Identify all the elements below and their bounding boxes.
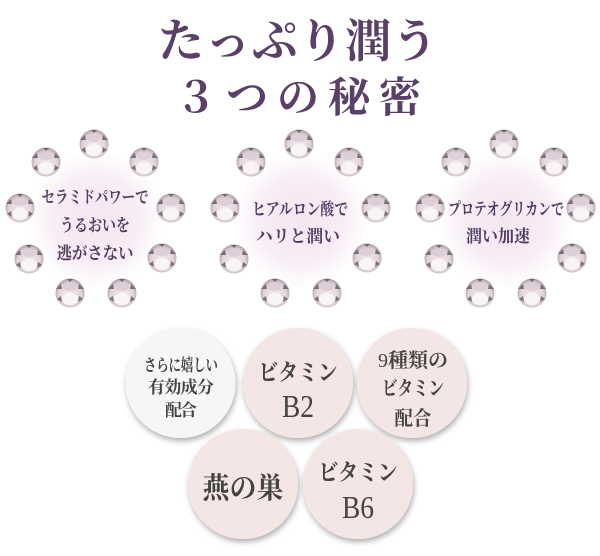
badge: additional ingredients: [126, 328, 236, 438]
text: hyaluronic acid: ハリと潤い: [256, 227, 340, 246]
badge: nine vitamins: ビタミン: [382, 377, 444, 400]
text: proteoglycan: [448, 200, 564, 246]
badge: nine vitamins: 9種類の: [378, 349, 448, 372]
badge: vitamin B2: [243, 328, 353, 438]
title: たっぷり潤う: [158, 16, 438, 67]
badge: additional ingredients: 有効成分: [148, 377, 214, 397]
text: ceramide power: うるおいを: [60, 216, 130, 235]
badge: vitamin B6: [303, 429, 413, 539]
text: ceramide power: セラミドパワーで: [42, 188, 148, 207]
panel: ceramide power: [6, 130, 186, 308]
panel: proteoglycan: [416, 130, 596, 308]
text: hyaluronic acid: [252, 200, 348, 246]
icon: ring of gems: [6, 130, 186, 308]
text: proteoglycan: プロテオグリカンで: [448, 200, 564, 219]
title: [158, 16, 438, 122]
text: proteoglycan: 潤い加速: [466, 226, 531, 246]
badge: bird's nest: [188, 429, 298, 539]
panel: hyaluronic acid: [210, 130, 390, 308]
title: ３つの秘密: [175, 76, 423, 122]
badge: nine vitamins: [357, 328, 467, 438]
badge: vitamin B6: ビタミン: [318, 460, 398, 485]
badge: vitamin B2: B2: [282, 388, 314, 424]
text: hyaluronic acid: ヒアルロン酸で: [252, 200, 348, 219]
badge: nine vitamins: 配合: [394, 407, 432, 430]
icon: ring of gems: [416, 130, 596, 308]
badge: additional ingredients: 配合: [165, 400, 197, 420]
badge: additional ingredients: さらに嬉しい: [144, 355, 218, 375]
text: bird's nest: 燕の巣: [202, 472, 284, 505]
badge: vitamin B6: B6: [342, 489, 374, 525]
text: ceramide power: [42, 188, 148, 263]
text: ceramide power: 逃がさない: [56, 244, 134, 263]
badge: vitamin B2: ビタミン: [258, 360, 338, 385]
icon: ring of gems: [210, 130, 390, 308]
